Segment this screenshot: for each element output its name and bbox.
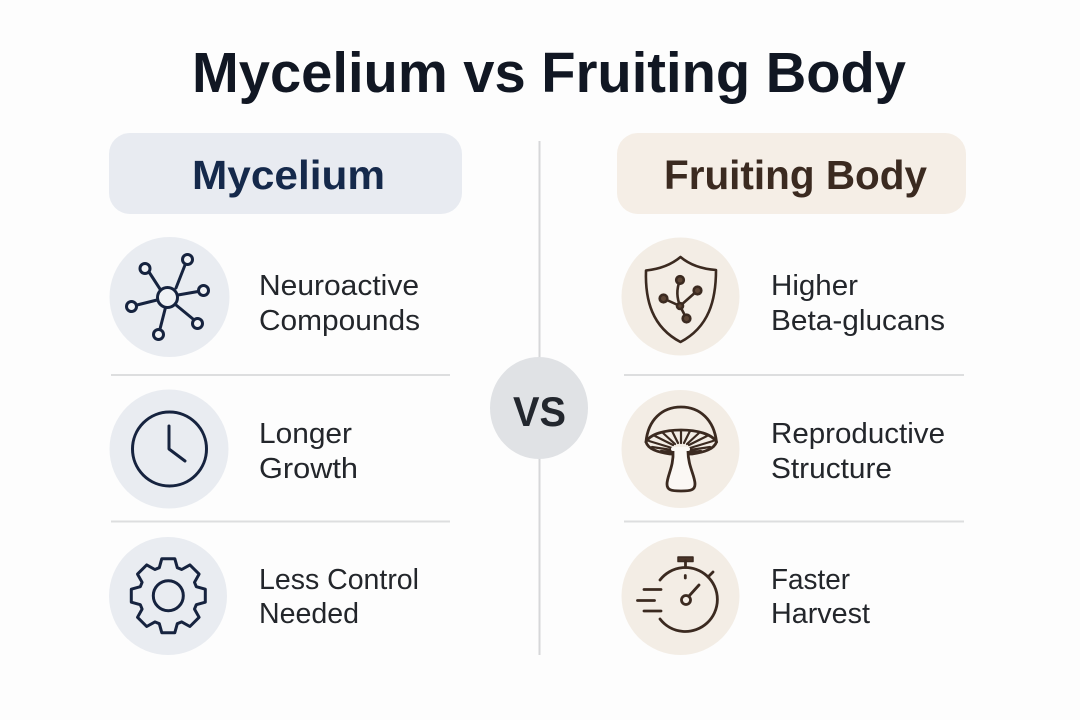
- icon: clock: [110, 390, 228, 508]
- text: Less Control Needed: Needed: [259, 598, 359, 630]
- text: Longer Growth: Longer: [259, 418, 352, 450]
- text: Longer Growth: Growth: [259, 453, 358, 485]
- icon: shield with molecule: [622, 238, 740, 356]
- title: Mycelium vs Fruiting Body: [192, 41, 906, 105]
- VS badge: VS: [513, 388, 566, 435]
- icon: stopwatch: [622, 537, 740, 655]
- text: Faster Harvest: Harvest: [771, 598, 870, 630]
- icon: network nodes: [110, 237, 230, 357]
- panel heading: Mycelium: Mycelium: [192, 152, 385, 198]
- text: Less Control Needed: Less Control: [259, 564, 419, 596]
- text: Neuroactive Compounds: Compounds: [259, 305, 420, 337]
- text: Reproductive Structure: [771, 418, 945, 485]
- text: Reproductive Structure: Reproductive: [771, 418, 945, 450]
- panel heading: Mycelium: [109, 133, 462, 214]
- text: Higher Beta-glucans: Beta-glucans: [771, 305, 945, 337]
- text: Faster Harvest: Faster: [771, 564, 850, 596]
- text: Neuroactive Compounds: Neuroactive: [259, 270, 419, 302]
- icon: gear: [109, 537, 227, 655]
- panel heading: Fruiting Body: Fruiting Body: [664, 152, 927, 198]
- text: Higher Beta-glucans: Higher: [771, 270, 858, 302]
- text: Reproductive Structure: Structure: [771, 453, 892, 485]
- VS badge: [490, 357, 588, 459]
- text: Longer Growth: [259, 418, 358, 485]
- text: Faster Harvest: [771, 564, 870, 630]
- text: Neuroactive Compounds: [259, 270, 420, 337]
- text: Less Control Needed: [259, 564, 419, 630]
- text: Higher Beta-glucans: [771, 270, 945, 337]
- icon: mushroom: [622, 390, 740, 508]
- panel heading: Fruiting Body: [617, 133, 966, 214]
